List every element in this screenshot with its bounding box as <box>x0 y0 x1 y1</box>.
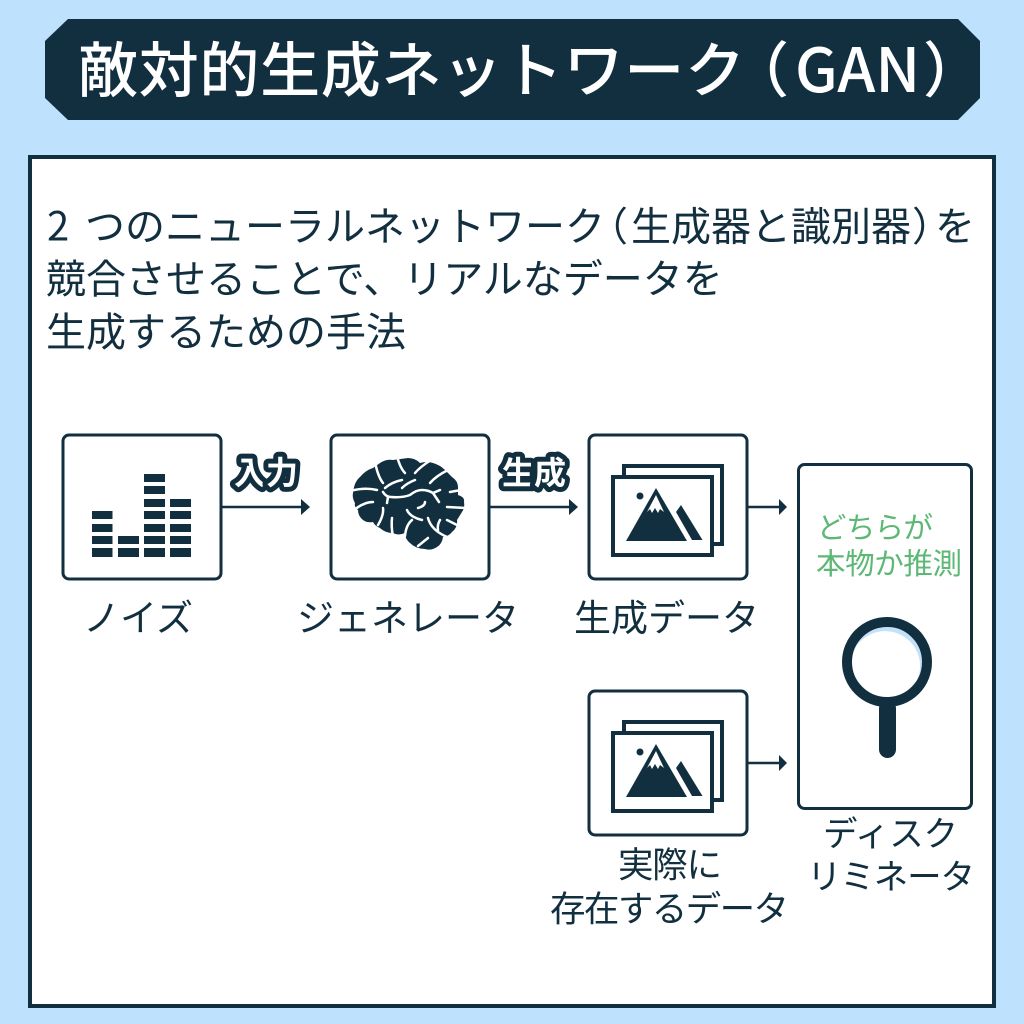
label: real data <box>550 837 789 932</box>
arrow: noise to generator <box>221 499 310 515</box>
title banner: GAN <box>795 21 920 110</box>
generated data node <box>574 435 759 642</box>
label: generate: 生成 <box>502 448 566 494</box>
arrow: generated data to discriminator <box>747 499 787 515</box>
real data node <box>550 691 789 932</box>
label: real data: 実際に <box>618 837 722 888</box>
label: generator: ジェネレータ <box>297 588 519 642</box>
label: input: 入力 <box>234 448 298 494</box>
description text: 競合させることで、リアルなデータを <box>46 247 723 305</box>
label: discriminator <box>807 806 975 899</box>
label: generated data: 生成データ <box>574 588 759 642</box>
title banner <box>45 19 983 120</box>
description text <box>46 194 975 358</box>
label: discriminator: リミネータ <box>807 849 975 899</box>
icon: magnifying glass <box>847 622 927 758</box>
description text: 生成器と識別器 <box>631 194 911 252</box>
icon: brain <box>350 456 466 550</box>
arrow: generator to generated data <box>489 499 578 515</box>
description text: を <box>935 194 975 252</box>
description text: つのニューラルネットワーク <box>85 194 605 252</box>
icon: equalizer bars <box>92 474 191 557</box>
noise node <box>63 435 221 642</box>
title banner: ） <box>923 23 983 110</box>
main panel <box>30 157 994 1006</box>
callout: guess which is real: どちらが <box>817 505 933 547</box>
callout: guess which is real: 本物か推測 <box>816 541 962 583</box>
label: real data: 存在するデータ <box>550 881 789 932</box>
label: noise: ノイズ <box>83 588 193 642</box>
title banner: （ <box>729 23 789 110</box>
title banner: 敵対的生成ネットワーク <box>78 23 745 110</box>
description text: ） <box>912 194 952 252</box>
icon: image stack <box>613 466 722 555</box>
description text: 2 <box>47 194 69 252</box>
generator node <box>297 435 519 642</box>
icon: image stack <box>613 722 722 811</box>
label: discriminator: ディスク <box>823 806 958 856</box>
callout: guess which is real <box>816 505 962 583</box>
discriminator node <box>798 464 975 899</box>
description text: （ <box>588 194 628 252</box>
description text: 生成するための手法 <box>46 300 406 358</box>
arrow: real data to discriminator <box>747 755 787 771</box>
